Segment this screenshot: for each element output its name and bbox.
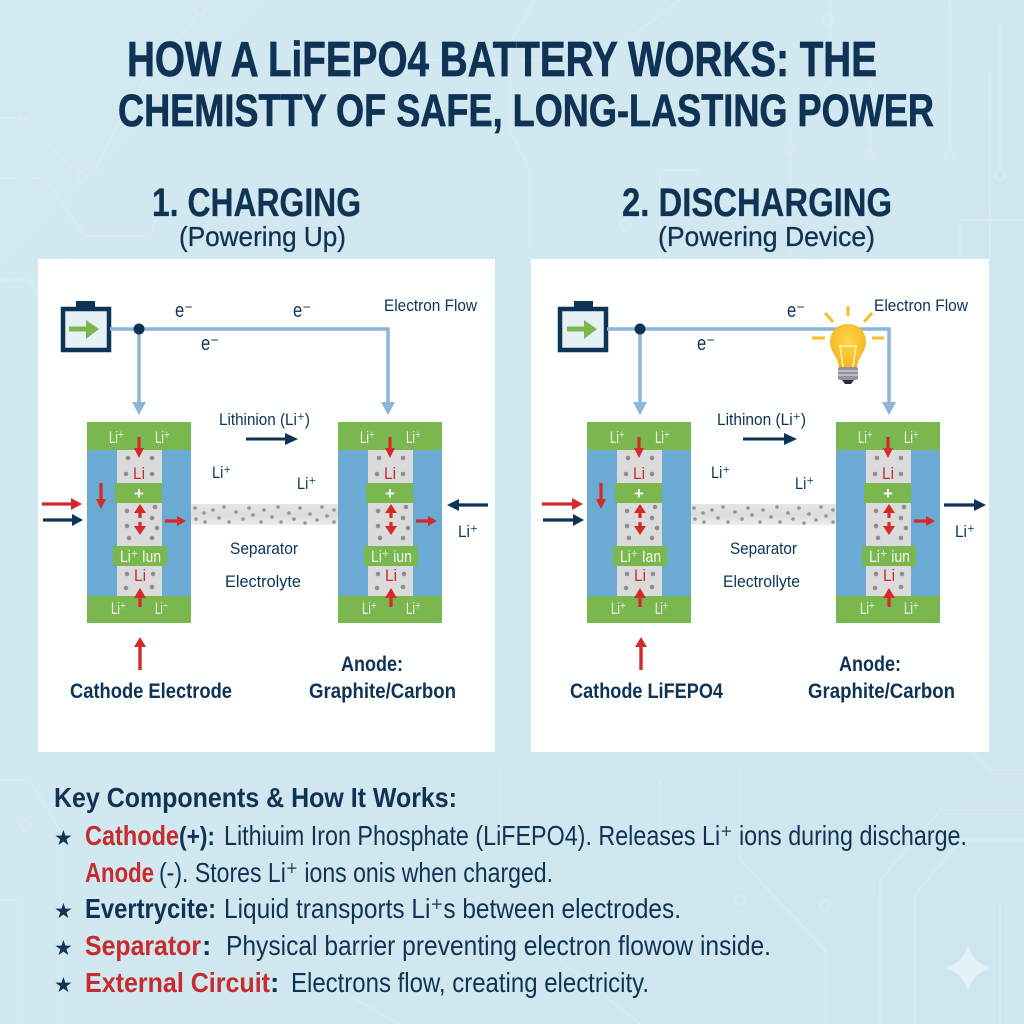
cathode cell [587, 422, 691, 623]
cathode cell: Li⁺ [655, 428, 670, 447]
cathode cell: Li⁺ [611, 599, 626, 618]
item: external circuit: : [270, 967, 279, 998]
item: electrolyte: ★ [54, 900, 73, 923]
arrow into anode with label [447, 499, 488, 541]
heading: charging: (Powering Up) [179, 221, 346, 252]
label: separator and electrolyte: Separator [730, 539, 797, 558]
heading: discharging [622, 181, 892, 252]
anode cell: Li⁺ [406, 599, 421, 618]
electron labels: e⁻ [787, 300, 805, 322]
panel: discharging diagram [531, 259, 989, 752]
floating ion labels: Li⁺ [212, 463, 231, 482]
item: separator: : [202, 930, 211, 961]
anode cell: Li⁺ [406, 428, 421, 447]
cathode cell: Li⁺ Ian [620, 547, 661, 566]
electron labels [175, 300, 311, 355]
icon: sparkle [944, 944, 992, 992]
floating ion labels: Li⁺ [711, 463, 730, 482]
item: external circuit: External Circuit [85, 967, 270, 998]
cathode cell: Li [633, 464, 645, 483]
cathode cell: Li⁺ Iun [120, 547, 161, 566]
label: lithium ion arrow [219, 410, 310, 445]
item: external circuit [54, 967, 649, 998]
electron wire circuit [110, 324, 395, 415]
cathode cell: Li⁺ [610, 428, 625, 447]
label: electron flow: Electron Flow [874, 296, 969, 315]
item: electrolyte: Liquid transports Li⁺s between electrodes. [224, 893, 681, 924]
cathode cell: Li [133, 464, 145, 483]
label: separator and electrolyte: Separator [230, 539, 298, 558]
icon: battery [560, 301, 606, 350]
item: separator: Physical barrier preventing electron flowow inside. [226, 930, 771, 961]
item: anode: Anode [85, 857, 154, 888]
label: lithium ion arrow: Lithinion (Li⁺) [219, 410, 310, 429]
anode cell [338, 422, 442, 623]
item: external circuit: ★ [54, 974, 73, 997]
anode cell: Li⁺ iun [869, 547, 910, 566]
floating ion labels: Li⁺ [795, 474, 814, 493]
electron labels: e⁻ [175, 300, 193, 322]
arrows into cathode [542, 498, 584, 526]
item: separator: ★ [54, 937, 73, 960]
cathode cell: + [134, 484, 144, 503]
item: electrolyte [54, 893, 681, 924]
floating ion labels [711, 463, 814, 493]
anode cell: Li⁺ iun [371, 547, 412, 566]
cathode cell: Li⁺ [109, 428, 124, 447]
item: cathode: (+): [179, 821, 215, 851]
item: external circuit: Electrons flow, creating electricity. [291, 967, 649, 998]
label: electron flow: Electron Flow [384, 296, 478, 315]
label: anode: Anode: [839, 653, 901, 676]
icon: battery [63, 301, 109, 350]
label: lithium ion arrow: Lithinon (Li⁺) [717, 410, 806, 429]
heading: charging [152, 181, 361, 252]
anode cell [836, 422, 940, 623]
cathode cell: Li⁺ [155, 428, 170, 447]
label: anode: Anode: [341, 653, 403, 676]
electron wire circuit [607, 324, 896, 415]
electron labels: e⁻ [697, 333, 715, 355]
heading: discharging: (Powering Device) [658, 221, 875, 252]
anode cell: + [385, 484, 395, 503]
anode cell: Li [882, 464, 894, 483]
anode cell: Li⁺ [360, 428, 375, 447]
floating ion labels [212, 463, 316, 493]
label: anode: Graphite/Carbon [808, 680, 955, 703]
item: cathode: Cathode [85, 820, 179, 851]
anode cell: Li⁺ [858, 428, 873, 447]
anode cell: + [883, 484, 893, 503]
label: anode: Graphite/Carbon [309, 680, 456, 703]
anode cell: Li [385, 566, 397, 585]
electron labels: e⁻ [293, 300, 311, 322]
panel: charging diagram [38, 259, 495, 752]
label: anode [808, 653, 955, 703]
cathode cell: Li [134, 566, 146, 585]
separator band [691, 504, 836, 525]
heading: key components: Key Components & How It Works: [54, 782, 457, 813]
anode cell: Li⁺ [904, 599, 919, 618]
heading: charging: 1. CHARGING [152, 181, 361, 225]
key components section [54, 782, 967, 998]
anode cell: Li⁺ [362, 599, 377, 618]
label: separator and electrolyte: Electrollyte [723, 572, 800, 591]
floating ion labels: Li⁺ [297, 474, 316, 493]
anode cell: Li [384, 464, 396, 483]
title [118, 33, 934, 136]
cathode cell: Li⁺ [111, 599, 126, 618]
label: cathode material: Cathode LiFEPO4 [570, 680, 723, 703]
separator band [191, 504, 338, 525]
arrows into cathode [42, 498, 83, 526]
label: anode [309, 653, 456, 703]
item: separator: Separator [85, 930, 201, 961]
cathode cell: Li⁻ [155, 599, 168, 618]
label: separator and electrolyte: Electrolyte [225, 572, 301, 591]
arrow into anode with label: Li⁺ [458, 522, 478, 541]
item: anode: (-). Stores Li⁺ ions onis when charged. [159, 857, 553, 888]
label: separator and electrolyte [225, 539, 301, 591]
anode cell: Li [883, 566, 895, 585]
arrow up to cathode [134, 637, 146, 670]
cathode cell: Li [634, 566, 646, 585]
electron labels: e⁻ [201, 333, 219, 355]
item: electrolyte: Evertrycite: [85, 893, 216, 924]
label: cathode electrode: Cathode Electrode [70, 680, 232, 703]
cathode cell: Li⁺ [655, 599, 668, 618]
label: lithium ion arrow [717, 410, 806, 445]
arrow up to cathode [635, 637, 647, 670]
label: separator and electrolyte [723, 539, 800, 591]
item: cathode: ★ [54, 827, 73, 850]
arrow out of anode with label [944, 499, 986, 541]
heading: discharging: 2. DISCHARGING [622, 181, 892, 225]
anode cell: Li⁺ [904, 428, 919, 447]
cathode cell [87, 422, 191, 623]
electron labels [697, 300, 805, 355]
anode cell: Li⁺ [860, 599, 875, 618]
icon: light bulb [812, 306, 884, 384]
cathode cell: + [634, 484, 644, 503]
arrow out of anode with label: Li⁺ [955, 522, 975, 541]
item: separator [54, 930, 771, 961]
